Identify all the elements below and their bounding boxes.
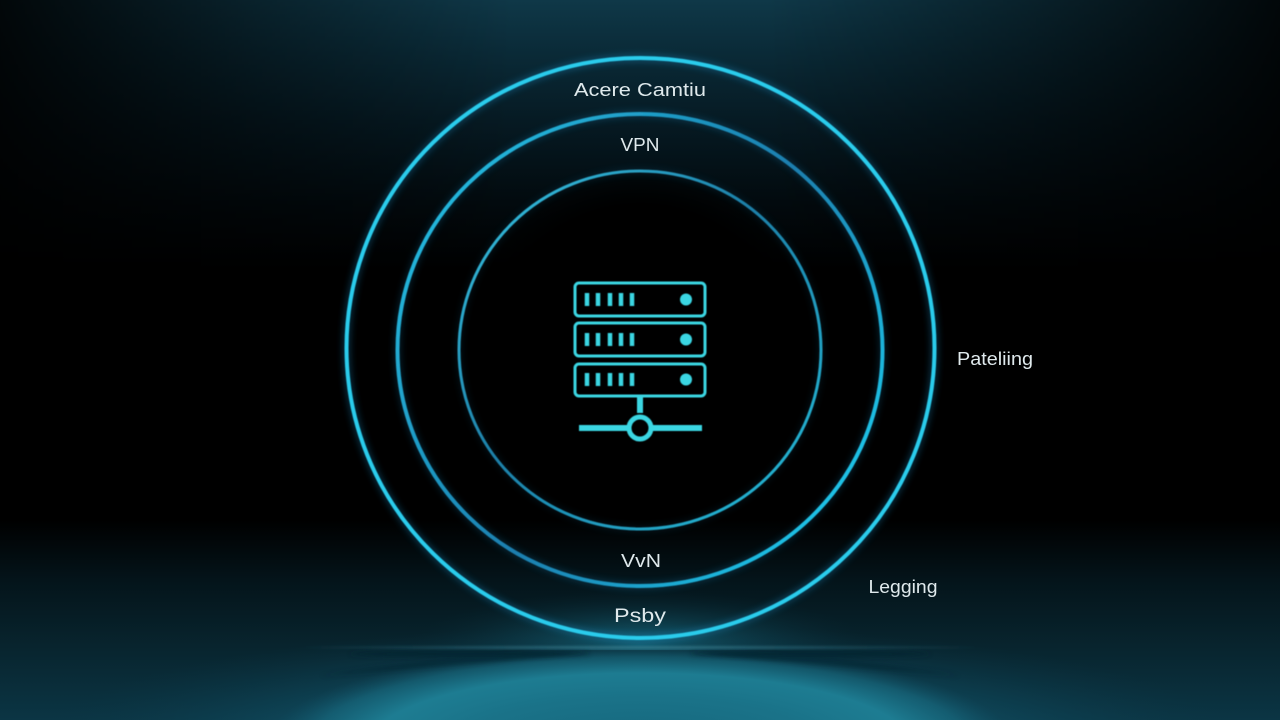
icon: server rack with network node (575, 283, 705, 439)
network connector (579, 396, 702, 439)
central dark disc (459, 169, 821, 531)
background glow: top (0, 0, 1280, 232)
server unit 1 (575, 283, 705, 316)
ring: outer (346, 58, 934, 638)
background glow: floor (0, 520, 1280, 720)
server unit 2 (575, 323, 705, 356)
server unit 3 (575, 364, 705, 396)
label: Policy: Psby (614, 606, 667, 627)
ring: inner (459, 171, 821, 529)
label: Patching: Pateliing (957, 349, 1033, 369)
label: Logging: Legging (868, 577, 938, 597)
label: Acere Camul: Acere Camtiu (574, 79, 706, 100)
ring: middle (398, 114, 882, 586)
label: VPN top: VPN (620, 135, 660, 155)
label: VPN bottom: VvN (621, 551, 661, 571)
